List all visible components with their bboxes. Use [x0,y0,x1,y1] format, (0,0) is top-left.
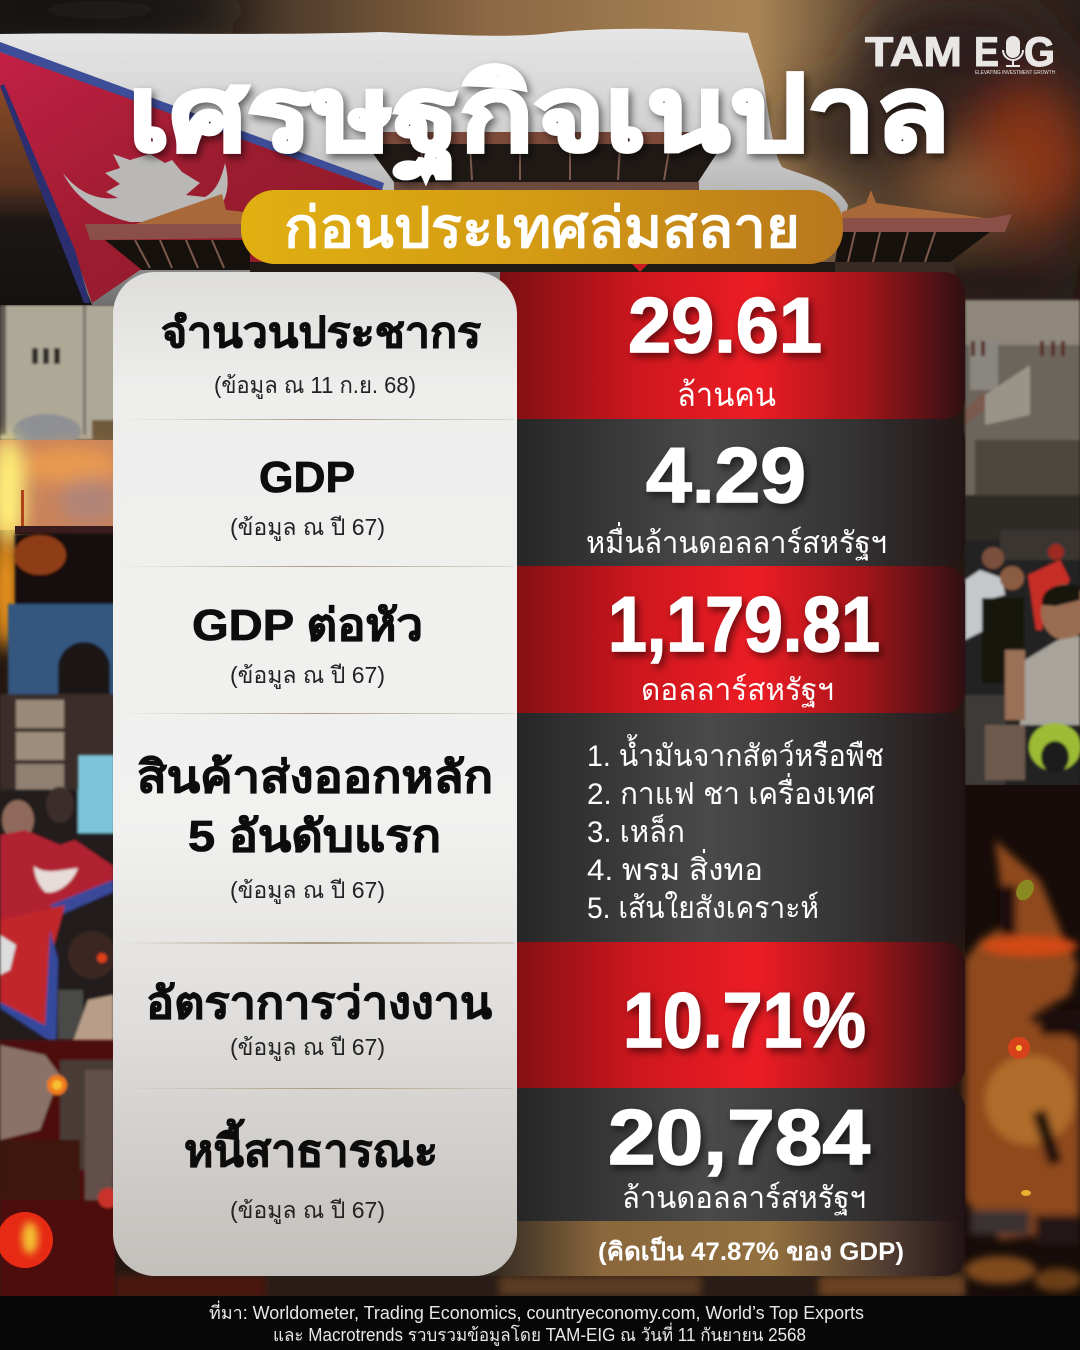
label: population [161,309,481,399]
building right [965,300,1080,555]
label: unemployment: (ข้อมูล ณ ปี 67) [230,1034,385,1061]
row band: unemployment [500,942,965,1088]
row band: debt to GDP [480,1221,965,1276]
value: GDP: 4.29 [646,431,806,519]
main roof [366,132,723,144]
label: main exports: (ข้อมูล ณ ปี 67) [230,877,385,904]
crowd right [965,530,1080,795]
value: GDP per capita: 1,179.81 [608,580,880,668]
red field [0,52,392,303]
label: population: จำนวนประชากร [161,309,481,356]
row band: exports [500,713,965,942]
label: GDP: (ข้อมูล ณ ปี 67) [230,514,385,541]
label: GDP [230,453,385,541]
value: debt share of GDP: (คิดเป็น 47.87% ของ GDP) [598,1236,904,1266]
subtitle pill: ก่อนประเทศล่มสลาย [284,196,800,259]
motorbike left [0,1040,118,1300]
label: GDP per capita: (ข้อมูล ณ ปี 67) [230,662,385,689]
value: GDP per capita: ดอลลาร์สหรัฐฯ [641,673,834,708]
dark background left of flag [0,84,92,305]
label: GDP per capita: GDP ต่อหัว [192,601,423,650]
right tier [842,190,985,220]
label: unemployment: อัตราการว่างงาน [146,979,492,1028]
left tier [130,194,245,226]
label: unemployment [146,979,492,1061]
rubble strip [115,1274,965,1298]
label: main exports [137,753,493,904]
label: public debt: หนี้สาธารณะ [184,1118,438,1176]
value: GDP: หมื่นล้านดอลลาร์สหรัฐฯ [586,522,887,561]
panel: values [480,272,965,1276]
headlight red glow [0,1212,53,1268]
sun emblem [63,154,228,222]
white cloth [0,29,848,305]
dark band and blue building [0,534,115,794]
value: population: 29.61 [628,281,822,369]
logo TAM EIG [865,28,1055,76]
value: public debt: ล้านดอลลาร์สหรัฐฯ [622,1181,866,1216]
smoke clouds [0,0,1080,310]
palace pagoda [85,132,1012,275]
sky [0,0,1080,305]
value: exports list: 4. พรม สิ่งทอ [587,849,763,887]
value: population: ล้านคน [677,376,776,413]
logo TAM EIG: E [974,28,999,75]
label: main exports: สินค้าส่งออกหลัก [137,753,493,802]
value: exports list: 3. เหล็ก [587,813,685,849]
value: exports list: 2. กาแฟ ชา เครื่องเทศ [587,773,875,811]
logo TAM EIG: TAM [865,28,962,75]
logo TAM EIG: G [1024,28,1055,75]
row band: population [500,272,965,419]
footer source: ที่มา: Worldometer, Trading Economics, countryeconomy.com, World’s Top Exports [209,1300,864,1323]
fire right [964,785,1080,1300]
footer source [0,1296,1080,1350]
nepal flag [0,29,848,305]
label: main exports: 5 อันดับแรก [188,812,441,861]
value: GDP [586,431,887,561]
value: public debt [608,1093,870,1216]
label: GDP per capita [192,601,423,689]
logo TAM EIG: ELEVATING INVESTMENT GROWTH [975,70,1055,76]
values text [586,281,904,1266]
labels text [137,309,493,1224]
value: GDP per capita [608,580,880,708]
row band: public debt [500,1088,965,1221]
building left [0,305,115,450]
center lower band [250,262,850,272]
value: public debt: 20,784 [608,1093,870,1181]
footer source: และ Macrotrends รวบรวมข้อมูลโดย TAM-EIG ณ วันที่ 11 กันยายน 2568 [273,1322,806,1346]
protesters left [0,755,116,1060]
label: population: (ข้อมูล ณ 11 ก.ย. 68) [214,372,416,399]
fire left [0,435,120,650]
title: เศรษฐกิจเนปาล [128,57,950,183]
value: population [628,281,822,413]
value: exports list: 1. น้ำมันจากสัตว์หรือพืช [587,734,884,773]
panel: labels background [113,272,517,1276]
row band: GDP [500,419,965,566]
row band: GDP per capita [500,566,965,713]
blue border [0,42,384,190]
label: public debt [184,1118,438,1224]
value: exports list: 5. เส้นใยสังเคราะห์ [587,891,819,925]
label: GDP: GDP [259,453,355,502]
value: exports list [587,734,884,925]
label: public debt: (ข้อมูล ณ ปี 67) [230,1197,385,1224]
value: unemployment: 10.71% [623,976,866,1064]
